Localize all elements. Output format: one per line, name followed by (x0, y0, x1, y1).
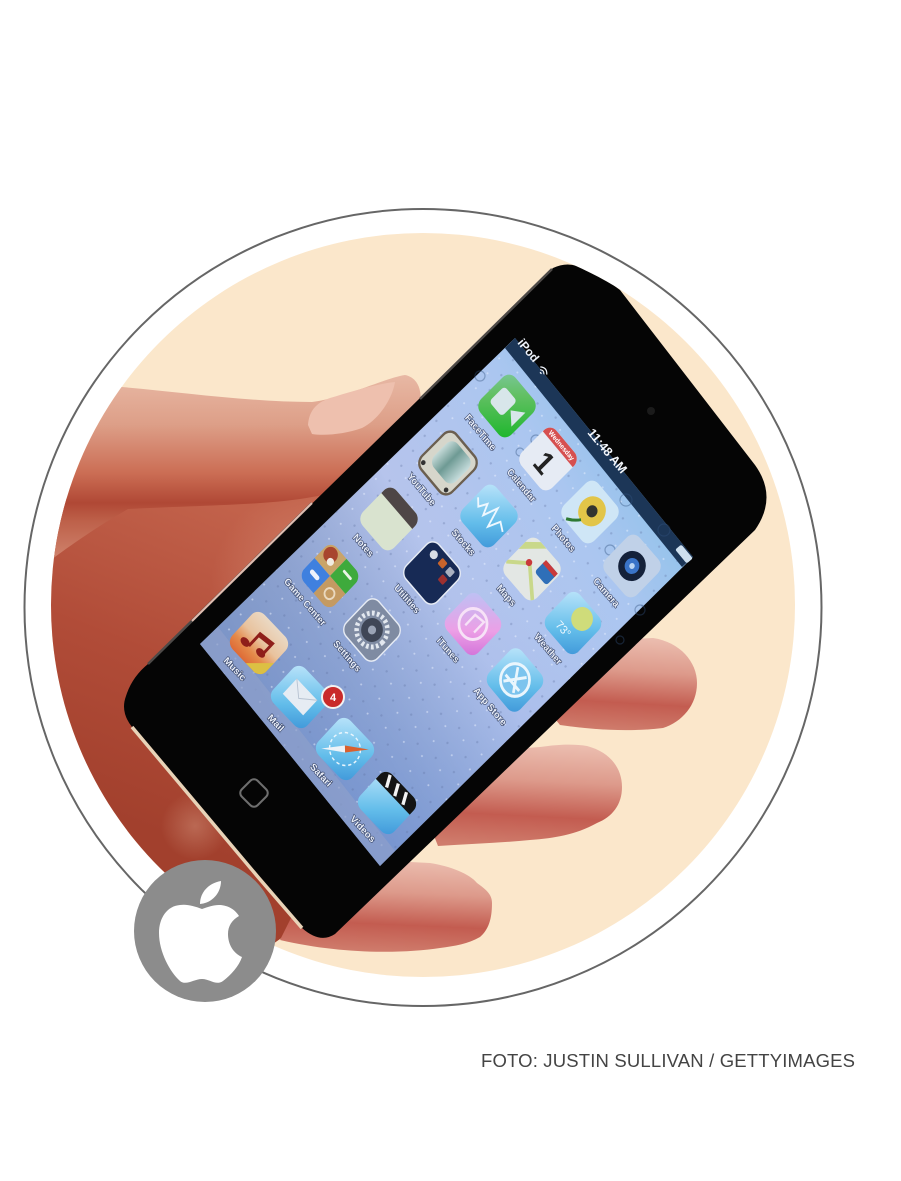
app: Calendar: Wednesday (547, 430, 575, 463)
app: Maps (496, 538, 561, 607)
app: Calendar: 1 (527, 445, 561, 481)
hand: index finger (556, 638, 697, 730)
mail badge: 4 (330, 692, 337, 704)
thumbnail (308, 382, 395, 435)
app: Weather: Weather (532, 631, 564, 668)
app: Notes: Notes (350, 532, 375, 560)
app: Camera (594, 534, 661, 609)
app: FaceTime: FaceTime (462, 412, 498, 454)
outer ring (24, 209, 822, 1006)
photo credit: FOTO: JUSTIN SULLIVAN / GETTYIMAGES (481, 1050, 855, 1071)
app: YouTube: YouTube (405, 471, 438, 509)
app: Settings: Settings (331, 638, 363, 675)
home button (239, 778, 269, 808)
Apple logo (159, 881, 242, 983)
hand: lower finger (280, 860, 492, 952)
phone body (124, 264, 766, 938)
wifi icon (540, 366, 548, 375)
peach background (51, 233, 795, 977)
app: Mail: Mail (265, 713, 286, 734)
hand: thumb (54, 375, 421, 558)
status text: iPod: iPod (515, 336, 542, 365)
app: Settings (333, 598, 401, 672)
phone screen (200, 338, 693, 866)
app: Music (222, 612, 288, 682)
app: Notes (352, 488, 418, 558)
app: YouTube (408, 430, 478, 506)
app: Game Center (284, 544, 358, 626)
app: Photos: Photos (549, 523, 577, 555)
app: Stocks (451, 484, 518, 556)
hand: middle finger (420, 745, 622, 846)
app: Music: Music (221, 655, 248, 684)
app: App Store (472, 648, 544, 726)
app: Utilities: Utilities (392, 583, 422, 616)
app: Mail (266, 666, 325, 732)
phone metal edges (132, 269, 552, 928)
app: Videos (350, 772, 416, 843)
status text: time: 11:48 AM (585, 426, 630, 476)
water drops on screen (475, 371, 670, 644)
hand: palm (51, 496, 320, 942)
app: Videos: Videos (348, 814, 377, 845)
app: Game Center: Game Center (282, 576, 328, 629)
app: Weather: 73° (553, 619, 572, 641)
mail badge (322, 686, 344, 708)
Apple badge (134, 860, 276, 1002)
app: Safari (310, 718, 374, 788)
status bar (505, 338, 693, 567)
app: Photos (550, 480, 619, 553)
photo disc (30, 233, 795, 977)
app: Camera: Camera (591, 576, 622, 611)
infographic photo composition (24, 208, 854, 1067)
app: Safari: Safari (307, 762, 334, 789)
app: iTunes: iTunes (434, 635, 461, 666)
app: App Store: App Store (471, 685, 509, 729)
front camera (647, 407, 655, 415)
app: Calendar: Calendar (504, 467, 538, 505)
app: Maps: Maps (494, 583, 518, 609)
app: FaceTime (464, 374, 536, 451)
dock strip (200, 627, 395, 866)
app: Stocks: Stocks (449, 527, 477, 559)
app: Calendar (507, 428, 577, 503)
app: Utilities (394, 541, 461, 614)
app: iTunes (436, 593, 502, 664)
battery icon (675, 545, 693, 563)
app: Weather (534, 592, 602, 665)
